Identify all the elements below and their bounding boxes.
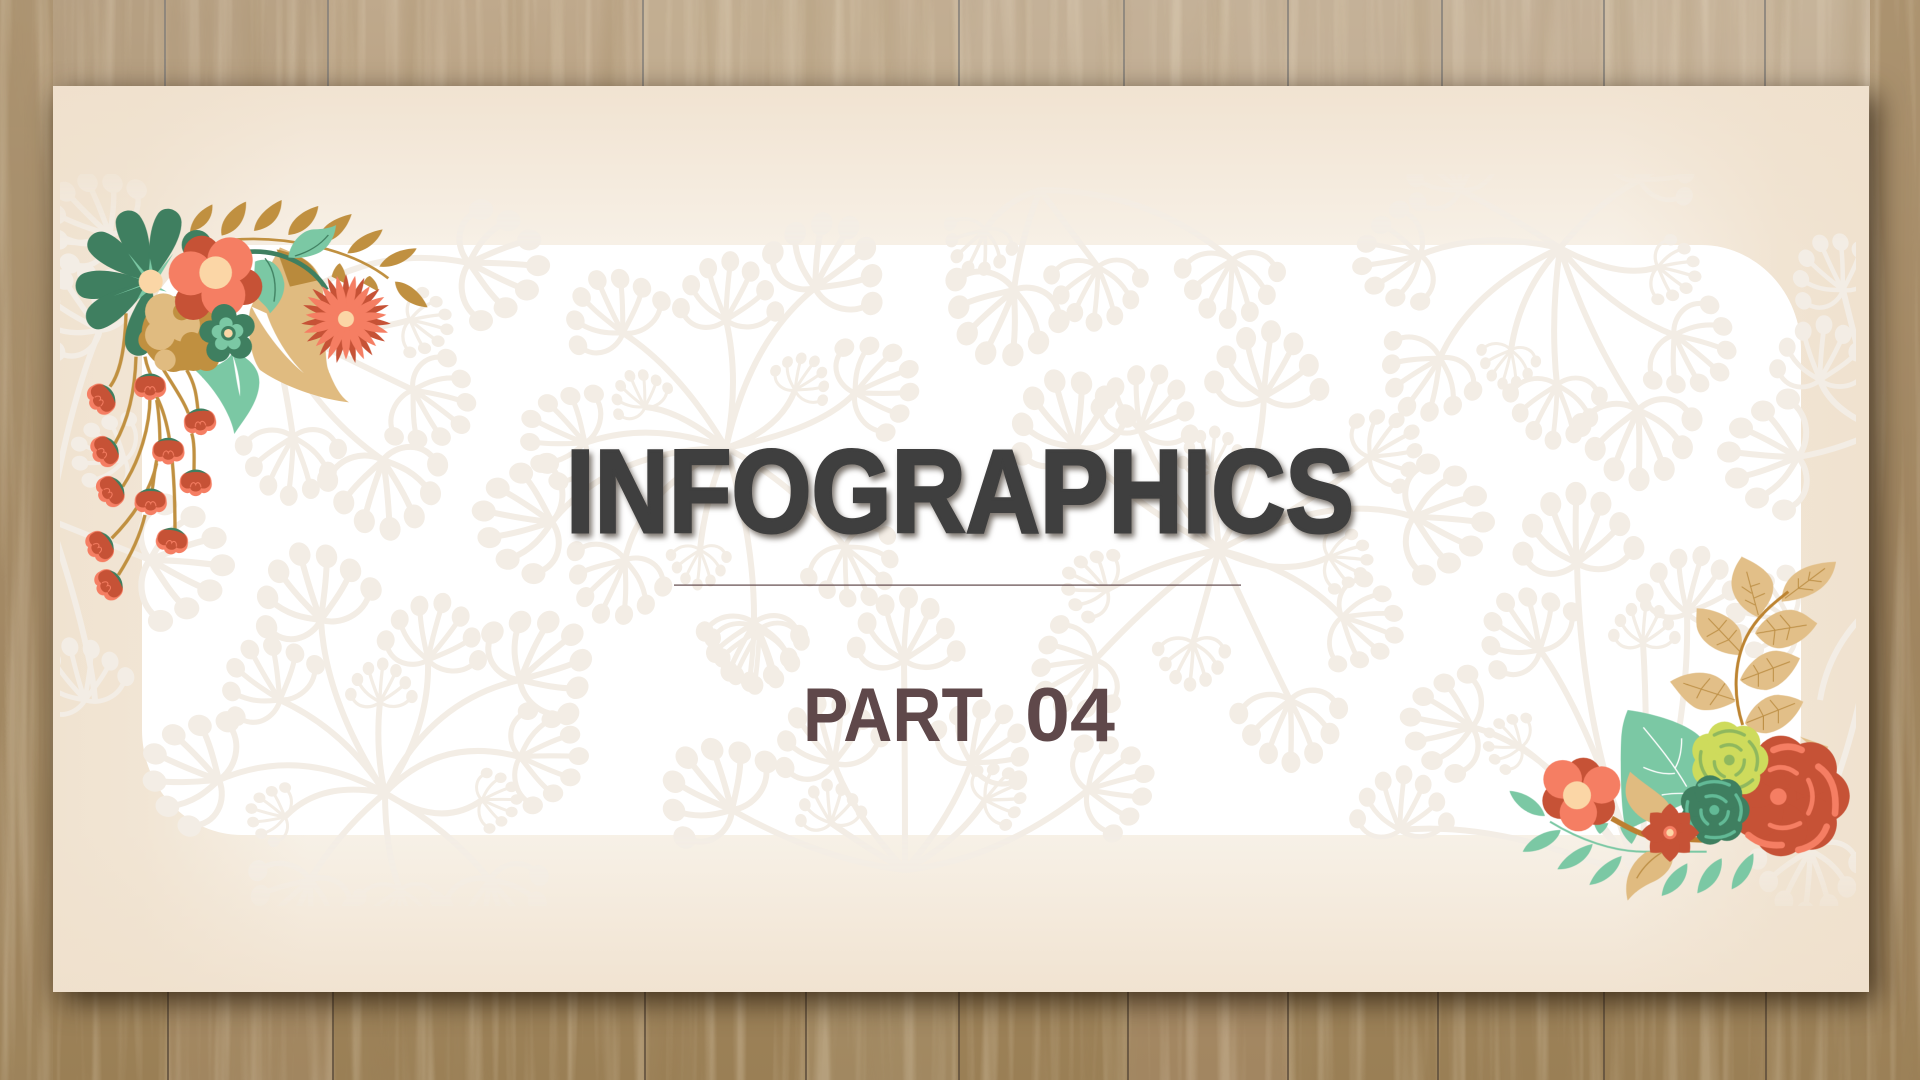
plant: right edge [1717, 234, 1856, 897]
coral flower [169, 236, 262, 320]
bouquet: top left [75, 200, 428, 606]
divider line [674, 584, 1241, 586]
tan leaves centre [1626, 772, 1673, 901]
scalloped gold bloom [138, 293, 219, 372]
background dandelion pattern [60, 183, 1856, 897]
mint leaves [195, 225, 336, 434]
red daisy [301, 274, 391, 364]
tan leaf branch [1670, 557, 1836, 757]
mint foliage [1509, 710, 1754, 896]
title: INFOGRAPHICS [566, 426, 1354, 558]
coral flower and stem [1542, 758, 1703, 840]
white rounded panel [142, 245, 1801, 835]
subtitle: PART [803, 673, 983, 758]
red rose [1730, 736, 1850, 856]
dark green flower [75, 205, 212, 358]
plant: top right [1352, 245, 1736, 491]
small green flower [199, 304, 255, 362]
plant: behind left bouquet [235, 197, 552, 552]
subtitle: 04 [1025, 673, 1115, 758]
red berries [80, 373, 218, 606]
gold leaves and arc [190, 200, 428, 307]
plant: upper centre [472, 245, 920, 692]
plant: lower left [142, 542, 592, 836]
bouquet: bottom right [1509, 557, 1850, 901]
paper card [53, 86, 1869, 992]
small red flower [1641, 803, 1699, 862]
subtitle [803, 673, 1115, 758]
yellow-green rose [1692, 722, 1768, 798]
plant: lower right [1349, 482, 1746, 835]
plant: top centre [922, 190, 1286, 388]
plant: bottom centre [662, 587, 1154, 835]
dark green rose [1681, 775, 1750, 845]
plant: left edge [60, 183, 235, 717]
plant: middle right [987, 318, 1495, 778]
berry stems [110, 313, 198, 575]
large tan leaf [249, 247, 349, 402]
